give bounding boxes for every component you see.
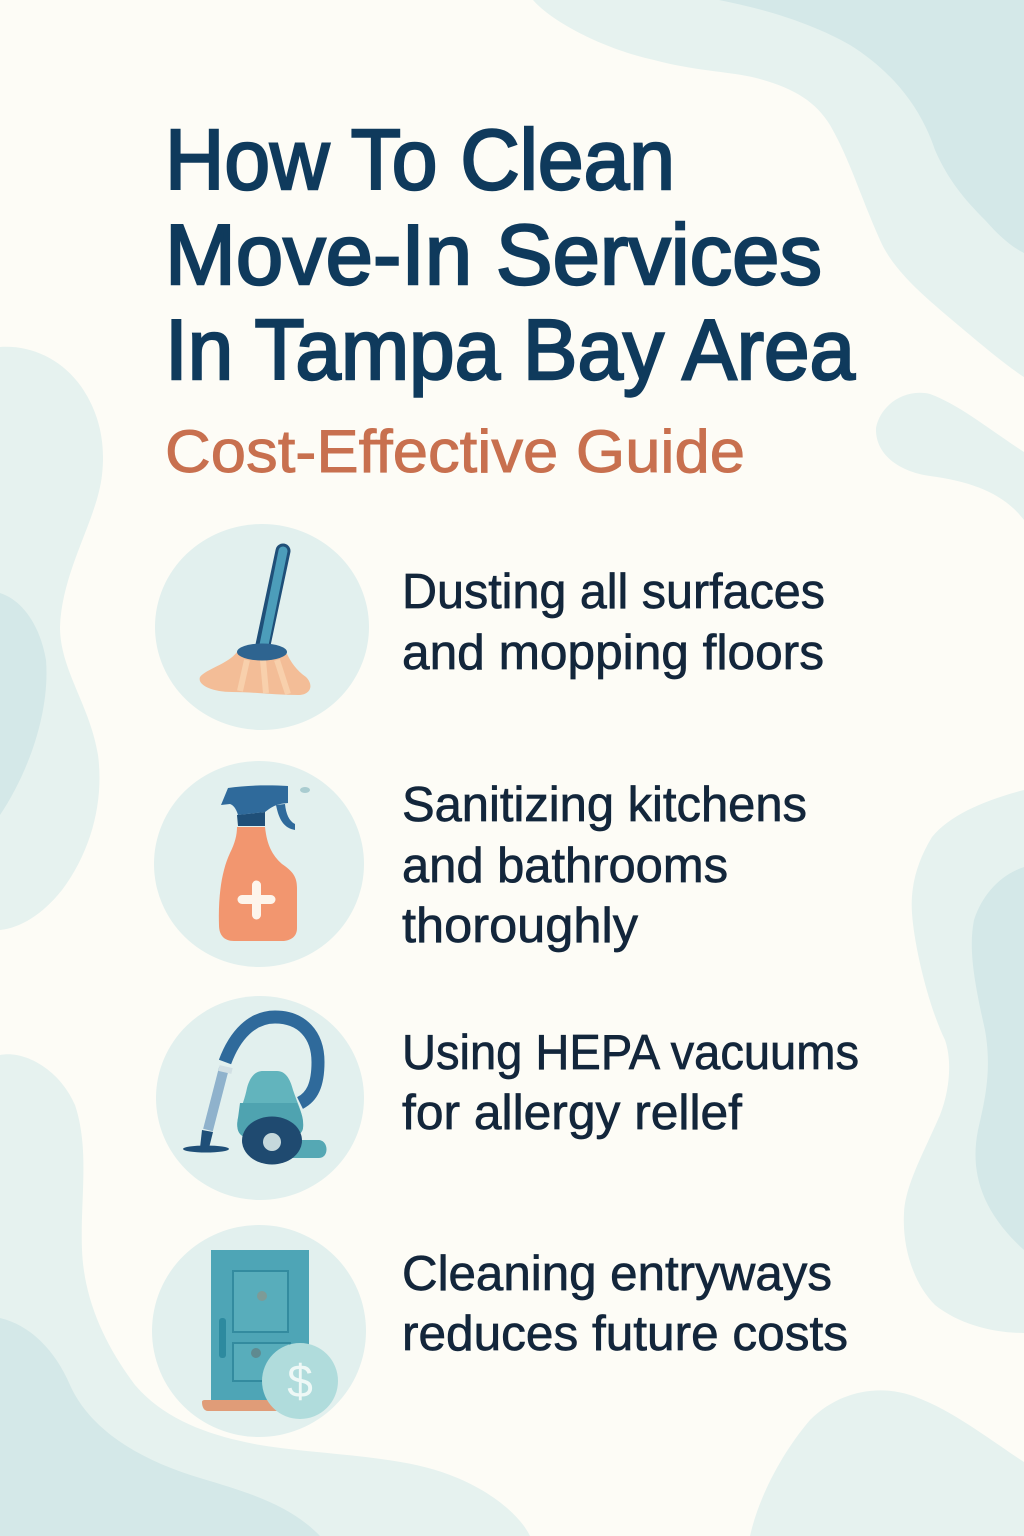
item: entryways [152, 1225, 848, 1437]
icon: broom [155, 524, 369, 730]
text: reduces future costs [402, 1307, 848, 1361]
text: and mopping floors [402, 626, 824, 680]
text [402, 1247, 848, 1361]
icon: vacuum cleaner [156, 996, 364, 1200]
subtitle: Cost-Effective Guide [165, 418, 745, 485]
item: dusting and mopping [155, 524, 825, 730]
title: Move-In Services [165, 208, 822, 303]
icon: door with dollar coin [152, 1225, 366, 1437]
text: Using HEPA vacuums [402, 1026, 859, 1080]
text: Cleaning entryways [402, 1247, 832, 1301]
item: HEPA vacuums [156, 996, 859, 1200]
text: Dusting all surfaces [402, 565, 825, 619]
item: sanitizing [154, 761, 807, 967]
icon: door with dollar coin: $ [287, 1355, 313, 1407]
text: thoroughly [402, 899, 639, 953]
text [402, 778, 807, 953]
icon: spray bottle [154, 761, 364, 967]
text [402, 565, 825, 680]
text: for allergy rellef [402, 1086, 742, 1140]
title [165, 113, 856, 398]
text [402, 1026, 859, 1140]
text: Sanitizing kitchens [402, 778, 807, 832]
title: In Tampa Bay Area [165, 303, 856, 398]
title: How To Clean [165, 113, 675, 208]
text: and bathrooms [402, 839, 728, 893]
